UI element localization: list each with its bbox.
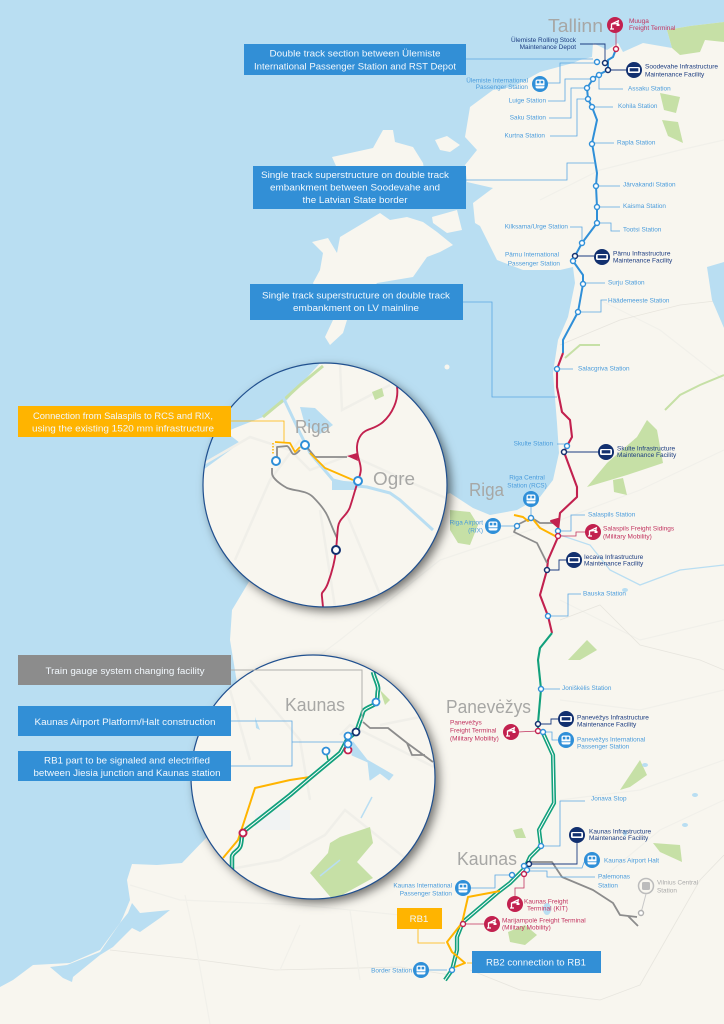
station labels: Estonia: Passenger Station xyxy=(476,84,528,91)
station labels: Estonia: Maintenance Facility xyxy=(645,72,705,78)
station labels: Latvia: (Military Mobility) xyxy=(603,534,652,540)
callout: double track section: Double track section between Ülemiste xyxy=(270,48,440,60)
callout: single track LV mainline: embankment on LV mainline xyxy=(293,303,419,314)
station labels: Lithuania: Passenger Station xyxy=(400,890,452,898)
station labels: Lithuania: Station xyxy=(657,888,677,894)
callout: RB2 connection xyxy=(472,951,601,973)
station labels: Estonia: Järvakandi Station xyxy=(623,182,676,188)
callout: Kaunas Airport platform: Kaunas Airport Platform/Halt construction xyxy=(34,717,216,728)
station labels: Estonia: Muuga xyxy=(629,18,649,25)
station labels: Lithuania: Terminal (KIT) xyxy=(527,906,568,912)
icon: Panevėžys train xyxy=(558,732,574,748)
station labels: Lithuania: Passenger Station xyxy=(577,744,630,750)
station labels: Estonia: Häädemeeste Station xyxy=(608,298,670,304)
icon: Muuga crane xyxy=(607,17,623,33)
icon: Skulte maintenance xyxy=(598,444,614,460)
Riga circle: grey links xyxy=(272,445,347,538)
station labels: Latvia: Skulte Infrastructure xyxy=(617,446,676,452)
icon: Riga Airport train xyxy=(485,518,501,534)
station labels: Lithuania: Jonava Stop xyxy=(591,796,627,802)
station labels: Estonia: Luige Station xyxy=(509,98,546,104)
station labels: Latvia xyxy=(450,366,677,598)
icon: Panevėžys crane xyxy=(503,724,519,740)
icon: Iecava maintenance xyxy=(566,552,582,568)
callout: RB1: RB1 xyxy=(410,914,428,925)
station labels: Latvia: Maintenance Facility xyxy=(617,452,677,459)
callout: RB2 connection: RB2 connection to RB1 xyxy=(486,958,586,968)
Riga circle: main line xyxy=(322,387,397,607)
station labels: Lithuania: Maintenance Facility xyxy=(589,835,649,842)
station labels: Estonia: Passenger Station xyxy=(508,260,560,268)
station labels: Estonia: Saku Station xyxy=(510,114,546,122)
station labels: Latvia: Riga Central xyxy=(509,474,545,482)
icon: Panevėžys maintenance xyxy=(558,711,574,727)
station labels: Lithuania: Maintenance Facility xyxy=(577,722,637,728)
station labels: Estonia xyxy=(466,18,718,304)
leader lines xyxy=(418,33,646,970)
stations: Estonia xyxy=(570,46,618,314)
station labels: Lithuania: Freight Terminal xyxy=(450,728,497,734)
Riga circle: yellow connection xyxy=(275,442,353,480)
city labels: Tallinn xyxy=(548,16,603,36)
station labels: Estonia: Soodevahe Infrastructure xyxy=(645,64,718,70)
icon: Kaunas Freight crane xyxy=(507,896,523,912)
station labels: Latvia: Maintenance Facility xyxy=(584,560,644,568)
callout: Kaunas Airport platform xyxy=(18,706,231,736)
rail lines: Riga links xyxy=(514,515,558,563)
station labels: Lithuania: Kaunas Airport Halt xyxy=(604,858,659,864)
station labels: Estonia: Rapla Station xyxy=(617,140,656,146)
background roads and borders xyxy=(110,140,724,1024)
station labels: Lithuania: Panevėžys Infrastructure xyxy=(577,714,649,722)
station labels: Estonia: Maintenance Facility xyxy=(613,258,673,264)
callout: Salaspils connection: Connection from Salaspils to RCS and RIX, xyxy=(33,411,213,422)
icon: Pärnu maintenance xyxy=(594,249,610,265)
station labels: Lithuania: Kaunas International xyxy=(393,882,452,890)
station labels: Lithuania: Border Station xyxy=(371,968,412,974)
panel: Riga magnifier circle: Riga xyxy=(295,417,331,437)
Kaunas circle: double track xyxy=(232,672,378,870)
station labels: Latvia: Salaspils Station xyxy=(588,512,636,518)
callout: single track Soodevahe to border xyxy=(253,166,466,209)
callout: Salaspils connection xyxy=(18,406,231,437)
station labels: Lithuania xyxy=(371,685,698,974)
station labels: Lithuania: (Military Mobility) xyxy=(502,924,551,932)
station labels: Latvia: Salaspils Freight Sidings xyxy=(603,526,675,532)
station labels: Estonia: Ülemiste Rolling Stock xyxy=(511,36,577,44)
callout: gauge changing facility xyxy=(18,655,231,685)
icon: Border Station train xyxy=(413,962,429,978)
station labels: Latvia: Bauska Station xyxy=(583,590,626,598)
panel: Riga magnifier circle: Ogre xyxy=(373,469,415,489)
station labels: Lithuania: Vilnius Central xyxy=(657,880,698,886)
rail line: RB1 (yellow) xyxy=(447,891,500,967)
rail line: Latvia section (crimson) xyxy=(540,353,577,633)
callout: RB1 part signaled and electrified: between Jiesia junction and Kaunas station xyxy=(34,768,220,779)
city labels: Kaunas xyxy=(457,849,517,869)
Kaunas circle: RB1 yellow line xyxy=(223,777,310,858)
callout: Salaspils connection: using the existing 1520 mm infrastructure xyxy=(32,424,214,434)
island: Vormsi xyxy=(435,136,460,152)
station labels: Estonia: Surju Station xyxy=(608,280,645,286)
city labels: Panevėžys xyxy=(446,697,531,717)
island: Muhu xyxy=(432,210,462,233)
station labels: Lithuania: (Military Mobility) xyxy=(450,736,499,742)
callout: single track LV mainline xyxy=(250,284,463,320)
callout leader lines xyxy=(231,421,362,766)
station labels: Lithuania: Panevėžys International xyxy=(577,736,645,744)
panel: Kaunas magnifier circle: Kaunas xyxy=(285,695,345,715)
station labels: Estonia: Kohila Station xyxy=(618,103,658,110)
station labels: Lithuania: Palemonas xyxy=(598,874,630,880)
station labels: Lithuania: Marijampolė Freight Terminal xyxy=(502,918,586,924)
station labels: Latvia: Station (RCS) xyxy=(507,482,547,490)
rail line: Vilnius branch (grey) xyxy=(530,862,638,926)
station labels: Estonia: Kaisma Station xyxy=(623,203,666,210)
Curonian lagoon xyxy=(50,903,170,982)
station labels: Latvia: Riga Airport xyxy=(450,520,483,526)
callout: single track Soodevahe to border: Single track superstructure on double track xyxy=(261,170,449,181)
icon: Marijampolė crane xyxy=(484,916,500,932)
Riga circle: dashed yellow section xyxy=(272,443,274,454)
rail line: Estonia section (blue) xyxy=(563,49,616,353)
stations: Lithuania xyxy=(450,686,644,972)
station labels: Estonia: Tootsi Station xyxy=(623,226,662,234)
station labels: Estonia: Ülemiste International xyxy=(466,76,528,84)
island: Hiiumaa xyxy=(332,130,425,175)
station labels: Latvia: Skulte Station xyxy=(514,440,553,448)
station labels: Estonia: Kilksama/Urge Station xyxy=(505,224,568,230)
callout: single track Soodevahe to border: the Latvian State border xyxy=(302,195,408,206)
panel: Kaunas magnifier circle xyxy=(191,655,440,900)
station labels: Lithuania: Joniškėlis Station xyxy=(562,685,612,692)
forests and lakes xyxy=(450,22,724,945)
callout: gauge changing facility: Train gauge system changing facility xyxy=(46,666,205,677)
island: Ruhnu xyxy=(444,364,450,370)
station labels: Latvia: Iecava Infrastructure xyxy=(584,554,644,561)
icon: Kaunas Airport train xyxy=(584,852,600,868)
rail line: Lithuania section (green) xyxy=(445,633,554,980)
panel: Riga magnifier circle xyxy=(200,360,450,607)
icon: Riga Central train xyxy=(523,491,539,507)
station labels: Estonia: Freight Terminal xyxy=(629,25,676,32)
station labels: Estonia: Pärnu Infrastructure xyxy=(613,250,671,258)
callout: RB1 xyxy=(397,908,442,929)
station labels: Latvia: Salacgriva Station xyxy=(578,366,630,372)
stations: Latvia xyxy=(514,366,570,618)
icon: Ülemiste train xyxy=(532,76,548,92)
station labels: Latvia: (RIX) xyxy=(468,528,483,534)
station labels: Estonia: Maintenance Depot xyxy=(520,44,576,51)
icon: Vilnius Central train xyxy=(638,878,654,894)
callout: RB1 part signaled and electrified xyxy=(18,751,231,781)
Kaunas circle: grey branch xyxy=(363,722,433,762)
callout: double track section xyxy=(244,44,466,75)
callout: single track LV mainline: Single track superstructure on double track xyxy=(262,290,450,302)
island: Saaremaa xyxy=(312,213,453,345)
station labels: Estonia: Assaku Station xyxy=(628,86,671,92)
city labels: Riga xyxy=(469,480,505,500)
icon: Soodevahe maintenance xyxy=(626,62,642,78)
callout: single track Soodevahe to border: embankment between Soodevahe and xyxy=(270,182,440,194)
station labels: Lithuania: Kaunas Freight xyxy=(524,898,568,906)
icon: Kaunas maintenance xyxy=(569,827,585,843)
icon: Salaspils crane xyxy=(585,524,601,540)
callout: double track section: International Passenger Station and RST Depot xyxy=(254,62,456,72)
station labels: Lithuania: Station xyxy=(598,882,618,890)
icon: Kaunas International train xyxy=(455,880,471,896)
station labels: Lithuania: Panevėžys xyxy=(450,720,483,726)
station labels: Estonia: Kurtna Station xyxy=(504,132,545,140)
station labels: Lithuania: Kaunas Infrastructure xyxy=(589,828,652,836)
station labels: Estonia: Pärnu International xyxy=(505,252,559,258)
callout: RB1 part signaled and electrified: RB1 part to be signaled and electrified xyxy=(44,756,210,766)
city labels xyxy=(446,16,603,869)
